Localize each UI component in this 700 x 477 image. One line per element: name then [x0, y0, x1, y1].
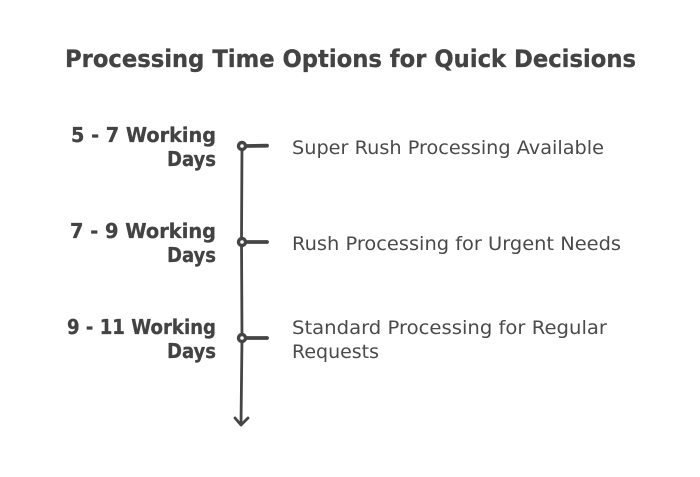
time label 1: Days — [167, 147, 216, 171]
item 2: 7 - 9 working days — [70, 219, 621, 267]
title: Processing Time Options for Quick Decisions — [65, 45, 636, 73]
time label 2: Days — [167, 243, 216, 267]
timeline marker 2 — [238, 238, 267, 246]
time label 3: Days — [167, 339, 216, 363]
time label 2: 7 - 9 Working — [70, 219, 216, 243]
timeline marker 3 — [238, 334, 267, 342]
timeline marker 1 — [238, 142, 267, 150]
time label 3: 9 - 11 Working — [67, 315, 216, 339]
description 1: Super Rush Processing Available — [292, 137, 604, 159]
time label 1: 5 - 7 Working — [71, 123, 216, 147]
description 3: Standard Processing for Regular — [292, 317, 607, 339]
time label 3 — [67, 315, 216, 363]
timeline arrow — [235, 146, 248, 425]
description 2: Rush Processing for Urgent Needs — [292, 233, 621, 255]
description 3 — [292, 317, 607, 363]
description 3: Requests — [292, 341, 379, 363]
item 1: 5 - 7 working days — [71, 123, 604, 171]
time label 2 — [70, 219, 216, 267]
item 3: 9 - 11 working days — [67, 315, 607, 363]
time label 1 — [71, 123, 216, 171]
